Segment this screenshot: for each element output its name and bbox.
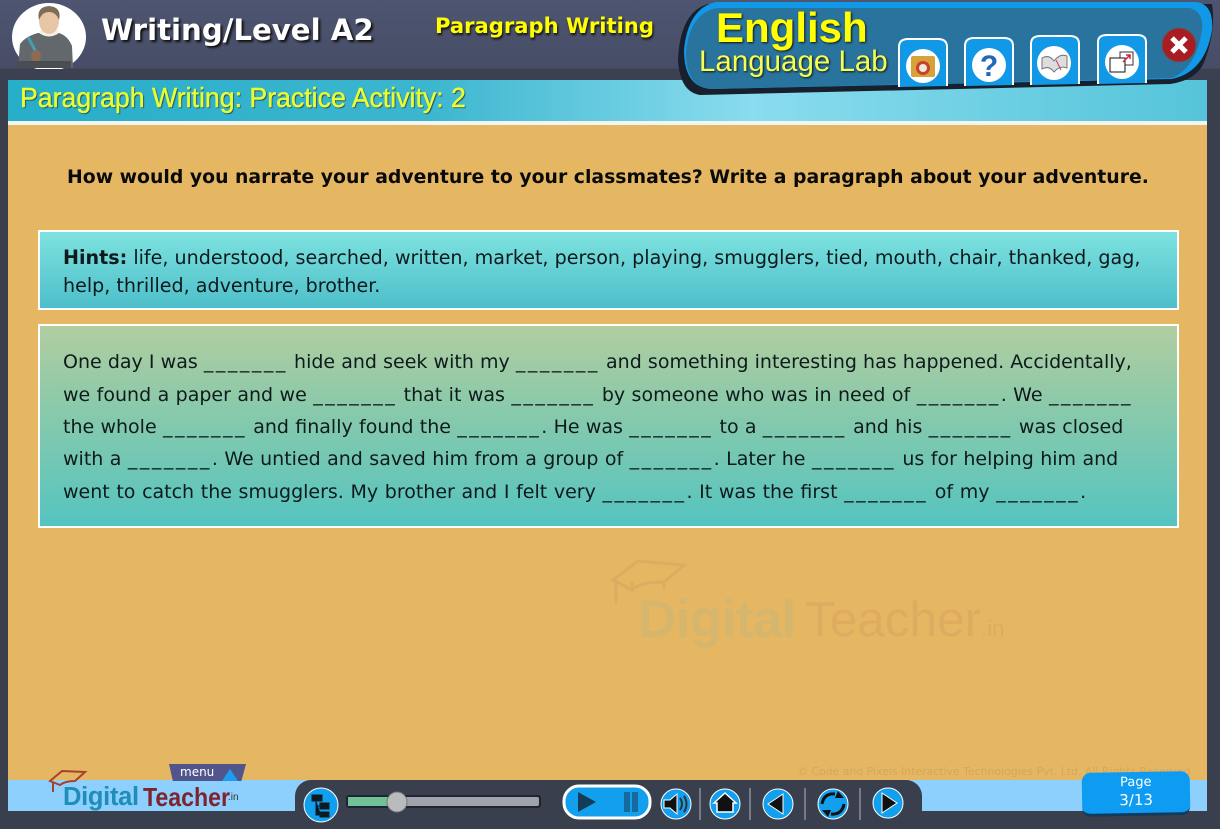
toolbar title: Language Lab <box>699 45 888 78</box>
play and pause <box>564 786 650 818</box>
toolbar title <box>699 4 888 78</box>
question: How would you narrate your adventure to your classmates? Write a paragraph about your adventure. <box>67 167 1149 188</box>
icon: back <box>763 789 793 819</box>
icon: reload <box>818 789 848 819</box>
logo Digital: Digital <box>63 783 139 811</box>
toolbar title: English <box>716 4 868 51</box>
menu label: menu <box>180 765 214 779</box>
page label: Page <box>1120 775 1152 790</box>
copyright: © Code and Pixels Interactive Technologies Pvt. Ltd. All Rights Reserved <box>797 765 1190 778</box>
help glyph: ? <box>980 50 998 83</box>
activity title bar <box>8 80 1207 121</box>
paragraph text: with a _______. We untied and saved him from a group of _______. Later he _______ us for helping him and <box>63 448 1118 470</box>
activity title text: Paragraph Writing: Practice Activity: 2 <box>20 82 466 113</box>
close button <box>1162 28 1196 62</box>
panel: paragraph <box>38 324 1179 528</box>
icon: watermark cap <box>610 560 687 604</box>
panel: hints <box>38 230 1179 310</box>
watermark Teacher: Teacher.in <box>805 592 1004 647</box>
icon: home <box>710 789 740 819</box>
logo .in: .in <box>228 792 239 803</box>
footer bottom strip <box>0 811 1220 829</box>
heading: Paragraph Writing: Paragraph Writing <box>435 13 654 38</box>
control bar <box>295 780 922 829</box>
paragraph text: the whole _______ and finally found the _______. He was _______ to a _______ and his _______ was closed <box>63 416 1123 438</box>
paragraph text: went to catch the smugglers. My brother and I felt very _______. It was the first _______ of my _______. <box>63 481 1086 503</box>
logo Teacher: Teacher <box>143 782 230 812</box>
icon: sound <box>661 789 691 819</box>
tab: clock folder <box>899 39 947 87</box>
hints text <box>63 246 1140 297</box>
logo: Digital Teacher <box>48 770 239 812</box>
controls <box>304 784 904 822</box>
icon: student avatar <box>12 3 86 69</box>
page number: 3/13 <box>1119 791 1153 809</box>
header bar <box>0 0 1220 80</box>
watermark logo <box>610 560 1004 649</box>
tab: book <box>1031 36 1079 85</box>
watermark Digital: Digital <box>638 590 796 649</box>
icon: menu arrow <box>222 769 238 781</box>
hints text: Hints: life, understood, searched, written, market, person, playing, smugglers, tied, mouth, chair, thanked, gag, <box>63 246 1140 269</box>
tab: help <box>965 38 1013 86</box>
icon: logo cap <box>48 770 88 792</box>
paragraph text: we found a paper and we _______ that it was _______ by someone who was in need of _______. We _______ <box>63 384 1133 406</box>
hints text: help, thrilled, adventure, brother. <box>63 274 380 297</box>
tab: windows <box>1098 35 1146 84</box>
paragraph text: One day I was _______ hide and seek with my _______ and something interesting has happened. Accidentally, <box>63 351 1132 373</box>
panel: English Language Lab toolbar <box>678 2 1213 95</box>
icon: tree menu <box>304 788 338 822</box>
footer band <box>8 780 1207 811</box>
title: Writing/Level A2: Writing/Level A2 <box>101 13 374 47</box>
progress slider <box>346 792 541 812</box>
content panel <box>8 121 1207 780</box>
menu tab <box>169 764 246 781</box>
page counter <box>1082 771 1190 817</box>
paragraph text <box>63 351 1133 503</box>
icon: next <box>873 788 903 818</box>
